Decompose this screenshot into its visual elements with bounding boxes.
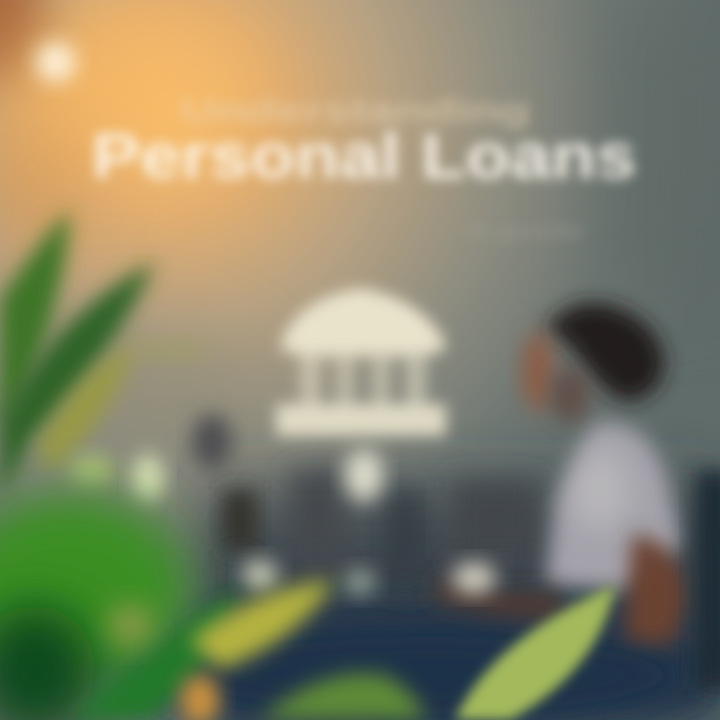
light flare: [36, 42, 76, 82]
arm: [625, 535, 688, 645]
subtitle line: Understanding: [180, 92, 530, 130]
hair: [545, 303, 665, 401]
person in profile: [430, 303, 720, 690]
foreground plant left: [0, 210, 335, 720]
icon: bank building: [276, 288, 446, 436]
hand highlight: [452, 562, 496, 594]
foreground leaf right: [260, 585, 615, 720]
caption line: A guide: [465, 218, 585, 243]
face: [521, 332, 555, 412]
shirt: [545, 422, 682, 590]
main heading: Personal Loans: [92, 120, 636, 192]
title: [92, 92, 636, 243]
back leaves: [0, 210, 70, 430]
main foliage: [0, 495, 190, 685]
dark chair: [695, 470, 720, 690]
desk and floor shadow: [150, 450, 720, 720]
desk objects: [192, 414, 540, 596]
